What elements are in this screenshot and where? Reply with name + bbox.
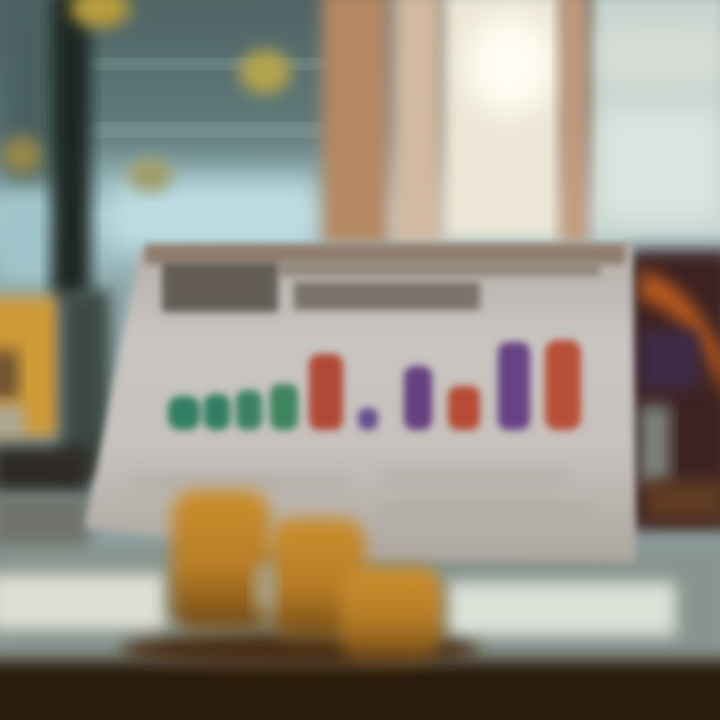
left yellow block and dark lower left [0, 290, 110, 565]
heading: blurred board title [162, 262, 600, 312]
bright window right side [440, 0, 720, 240]
table surface [0, 545, 720, 670]
bottom dark table edge [0, 660, 720, 720]
peach columns [322, 0, 588, 245]
right dark backdrop with orange and purple [628, 250, 720, 530]
board top edge [145, 244, 625, 264]
yellow bokeh lights [2, 0, 291, 192]
panel: chart board [85, 244, 636, 562]
icon: stacked gold coins [120, 490, 480, 668]
dark pillar [52, 0, 90, 300]
text block: blurred lower board text [130, 470, 590, 517]
bar chart: blurred colored bars [168, 340, 581, 430]
